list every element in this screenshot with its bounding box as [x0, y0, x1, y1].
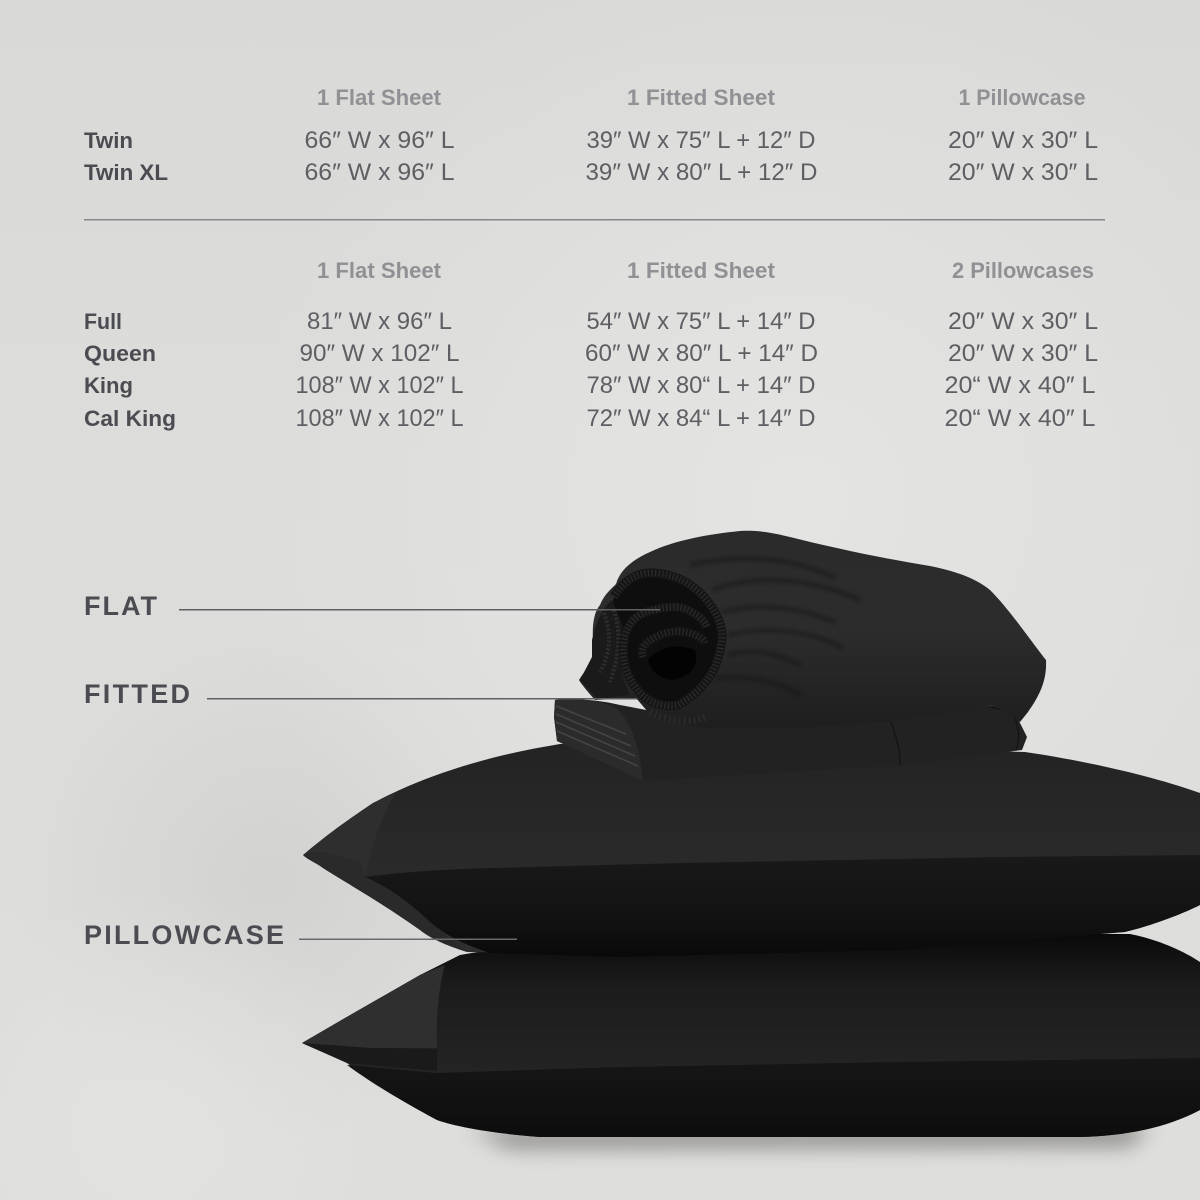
- row: Queen: 60″ W x 80″ L + 14″ D: [585, 340, 818, 367]
- row: King: 78″ W x 80“ L + 14″ D: [586, 372, 816, 399]
- row: Full: [84, 308, 1098, 335]
- row: Twin: Twin: [84, 128, 133, 153]
- row: Queen: [84, 340, 1098, 367]
- row: Cal King: 72″ W x 84“ L + 14″ D: [586, 405, 816, 432]
- row: Twin: 39″ W x 75″ L + 12″ D: [586, 127, 816, 154]
- column headers: 1 Pillowcase: [958, 85, 1086, 110]
- row: Full: Full: [84, 309, 122, 334]
- lower pillow: [302, 933, 1200, 1137]
- row: Cal King: Cal King: [84, 406, 176, 431]
- fabric gathers: [690, 559, 860, 695]
- column headers: 2 Pillowcases: [952, 258, 1094, 283]
- row: Twin XL: 39″ W x 80″ L + 12″ D: [586, 159, 818, 186]
- callout: fitted: FITTED: [84, 679, 190, 709]
- row: Twin XL: [84, 159, 1098, 186]
- row: Twin: [84, 127, 1098, 154]
- row: Queen: Queen: [84, 341, 156, 366]
- row: Twin XL: 66″ W x 96″ L: [304, 159, 454, 186]
- column headers: 1 Flat Sheet: [317, 85, 442, 110]
- row: Twin XL: 20″ W x 30″ L: [948, 159, 1098, 186]
- row: Twin: 20″ W x 30″ L: [948, 127, 1098, 154]
- column headers: [317, 85, 1086, 110]
- fitted sheet: [579, 531, 1046, 729]
- row: Full: 54″ W x 75″ L + 14″ D: [586, 308, 816, 335]
- column headers: 1 Fitted Sheet: [627, 85, 776, 110]
- row: Full: 81″ W x 96″ L: [307, 308, 452, 335]
- column headers: 1 Fitted Sheet: [627, 258, 776, 283]
- size table: full and larger sizes: [84, 258, 1098, 432]
- row: King: 20“ W x 40″ L: [944, 372, 1096, 399]
- row: Queen: 90″ W x 102″ L: [300, 340, 460, 367]
- row: King: 108″ W x 102″ L: [296, 372, 464, 399]
- row: Full: 20″ W x 30″ L: [948, 308, 1098, 335]
- row: King: [84, 372, 1096, 399]
- flat sheet: [554, 699, 1027, 781]
- row: King: King: [84, 373, 133, 398]
- product photo: stacked bedding: [302, 531, 1200, 1148]
- column headers: 1 Flat Sheet: [317, 258, 442, 283]
- callout: flat: FLAT: [84, 591, 158, 621]
- callout: pillowcase: PILLOWCASE: [84, 920, 284, 950]
- row: Twin: 66″ W x 96″ L: [304, 127, 454, 154]
- column headers: [317, 258, 1094, 283]
- row: Cal King: 108″ W x 102″ L: [296, 405, 464, 432]
- upper pillow: [303, 742, 1200, 957]
- size table: twin sizes: [84, 85, 1098, 186]
- elastic opening and roll: [580, 573, 722, 721]
- row: Twin XL: Twin XL: [84, 160, 168, 185]
- floor shadow: [470, 1126, 1150, 1148]
- row: Cal King: [84, 405, 1096, 432]
- row: Cal King: 20“ W x 40″ L: [944, 405, 1096, 432]
- row: Queen: 20″ W x 30″ L: [948, 340, 1098, 367]
